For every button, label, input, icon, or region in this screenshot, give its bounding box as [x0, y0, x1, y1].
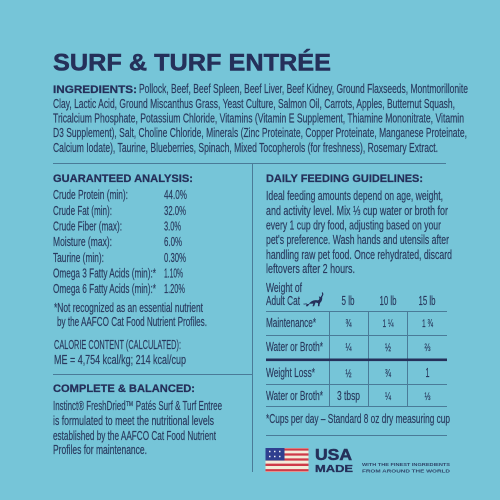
feeding table: [266, 281, 447, 406]
table rows: Water or Broth*: [266, 340, 323, 354]
footnote: aafco: by the AAFCO Cat Food Nutrient Profiles.: [57, 315, 207, 329]
analysis table: 0.30%: [164, 251, 186, 265]
analysis table: Moisture (max):: [53, 235, 112, 249]
table header: [266, 281, 436, 308]
table rows: ¼: [385, 391, 392, 403]
table header: Weight of: [266, 281, 302, 295]
table rows: Maintenance*: [266, 316, 316, 330]
footnote: aafco: [54, 301, 207, 329]
analysis table: 1.20%: [164, 282, 185, 296]
table rows: ¼: [346, 342, 352, 354]
usa made wordmark: [315, 447, 353, 475]
analysis table: 32.0%: [164, 204, 186, 218]
tagline: [362, 462, 451, 474]
calorie content: CALORIE CONTENT (CALCULATED):: [54, 338, 181, 352]
analysis table: 3.0%: [164, 220, 181, 234]
analysis table: Taurine (min):: [53, 251, 104, 265]
calorie content: ME = 4,754 kcal/kg; 214 kcal/cup: [54, 353, 186, 367]
table rows: 3 tbsp: [337, 389, 360, 403]
heading: complete and balanced: COMPLETE & BALANCED:: [53, 383, 195, 395]
tagline: FROM AROUND THE WORLD: [362, 468, 451, 474]
statement text: established by the AAFCO Cat Food Nutrient: [53, 429, 216, 443]
icon: us flag: [266, 448, 308, 472]
table header: 10 lb: [380, 294, 396, 308]
table header: 15 lb: [418, 294, 436, 308]
statement text: Instinct® FreshDried™ Patés Surf & Turf Entree: [53, 399, 222, 413]
calorie content: [54, 338, 186, 367]
table rows: Weight Loss*: [266, 366, 315, 380]
tagline: WITH THE FINEST INGREDIENTS: [362, 462, 451, 468]
table rows: 1 ¾: [422, 318, 433, 330]
table rows: 1: [426, 366, 430, 380]
statement text: [53, 399, 222, 457]
title: SURF & TURF ENTRÉE: [53, 48, 331, 76]
icon: cat: [303, 292, 323, 306]
analysis table: [53, 188, 187, 296]
heading: guaranteed analysis: GUARANTEED ANALYSIS:: [53, 173, 193, 185]
table rows: ½: [385, 342, 391, 354]
usa made wordmark: USA: [315, 447, 352, 464]
table rows: ⅔: [424, 342, 430, 354]
usa made badge: [266, 447, 451, 475]
analysis table: 1.10%: [164, 266, 183, 280]
analysis table: 44.0%: [164, 188, 187, 202]
footnote: aafco: *Not recognized as an essential nutrient: [54, 301, 203, 315]
table rows: ⅓: [424, 391, 430, 403]
ingredients text block: INGREDIENTS:: [53, 84, 137, 96]
analysis table: 6.0%: [164, 235, 182, 249]
analysis table: Crude Fat (min):: [53, 204, 112, 218]
table rows: ¾: [385, 368, 392, 380]
analysis table: Crude Protein (min):: [53, 188, 128, 202]
analysis table: Omega 6 Fatty Acids (min):*: [53, 282, 156, 296]
analysis table: Crude Fiber (max):: [53, 220, 122, 234]
ingredients text block: [53, 82, 468, 155]
heading: daily feeding guidelines: DAILY FEEDING GUIDELINES:: [266, 173, 423, 185]
feeding instructions: [266, 189, 452, 276]
table rows: 1 ¼: [382, 318, 394, 330]
panel: daily feeding guidelines: [266, 173, 452, 426]
table header: Adult Cat: [266, 294, 300, 308]
table rows: [266, 316, 433, 403]
analysis table: Omega 3 Fatty Acids (min):*: [53, 266, 156, 280]
table rows: ¾: [346, 318, 352, 330]
table rows: ½: [346, 368, 352, 380]
table header: 5 lb: [342, 294, 354, 308]
statement text: is formulated to meet the nutritional levels: [53, 414, 214, 428]
panel: complete and balanced: [53, 383, 222, 457]
statement text: Profiles for maintenance.: [53, 443, 147, 457]
usa made wordmark: MADE: [315, 464, 353, 475]
panel: guaranteed analysis: [53, 173, 207, 367]
table rows: Water or Broth*: [266, 389, 323, 403]
feeding instructions: leftovers after 2 hours.: [266, 262, 355, 276]
